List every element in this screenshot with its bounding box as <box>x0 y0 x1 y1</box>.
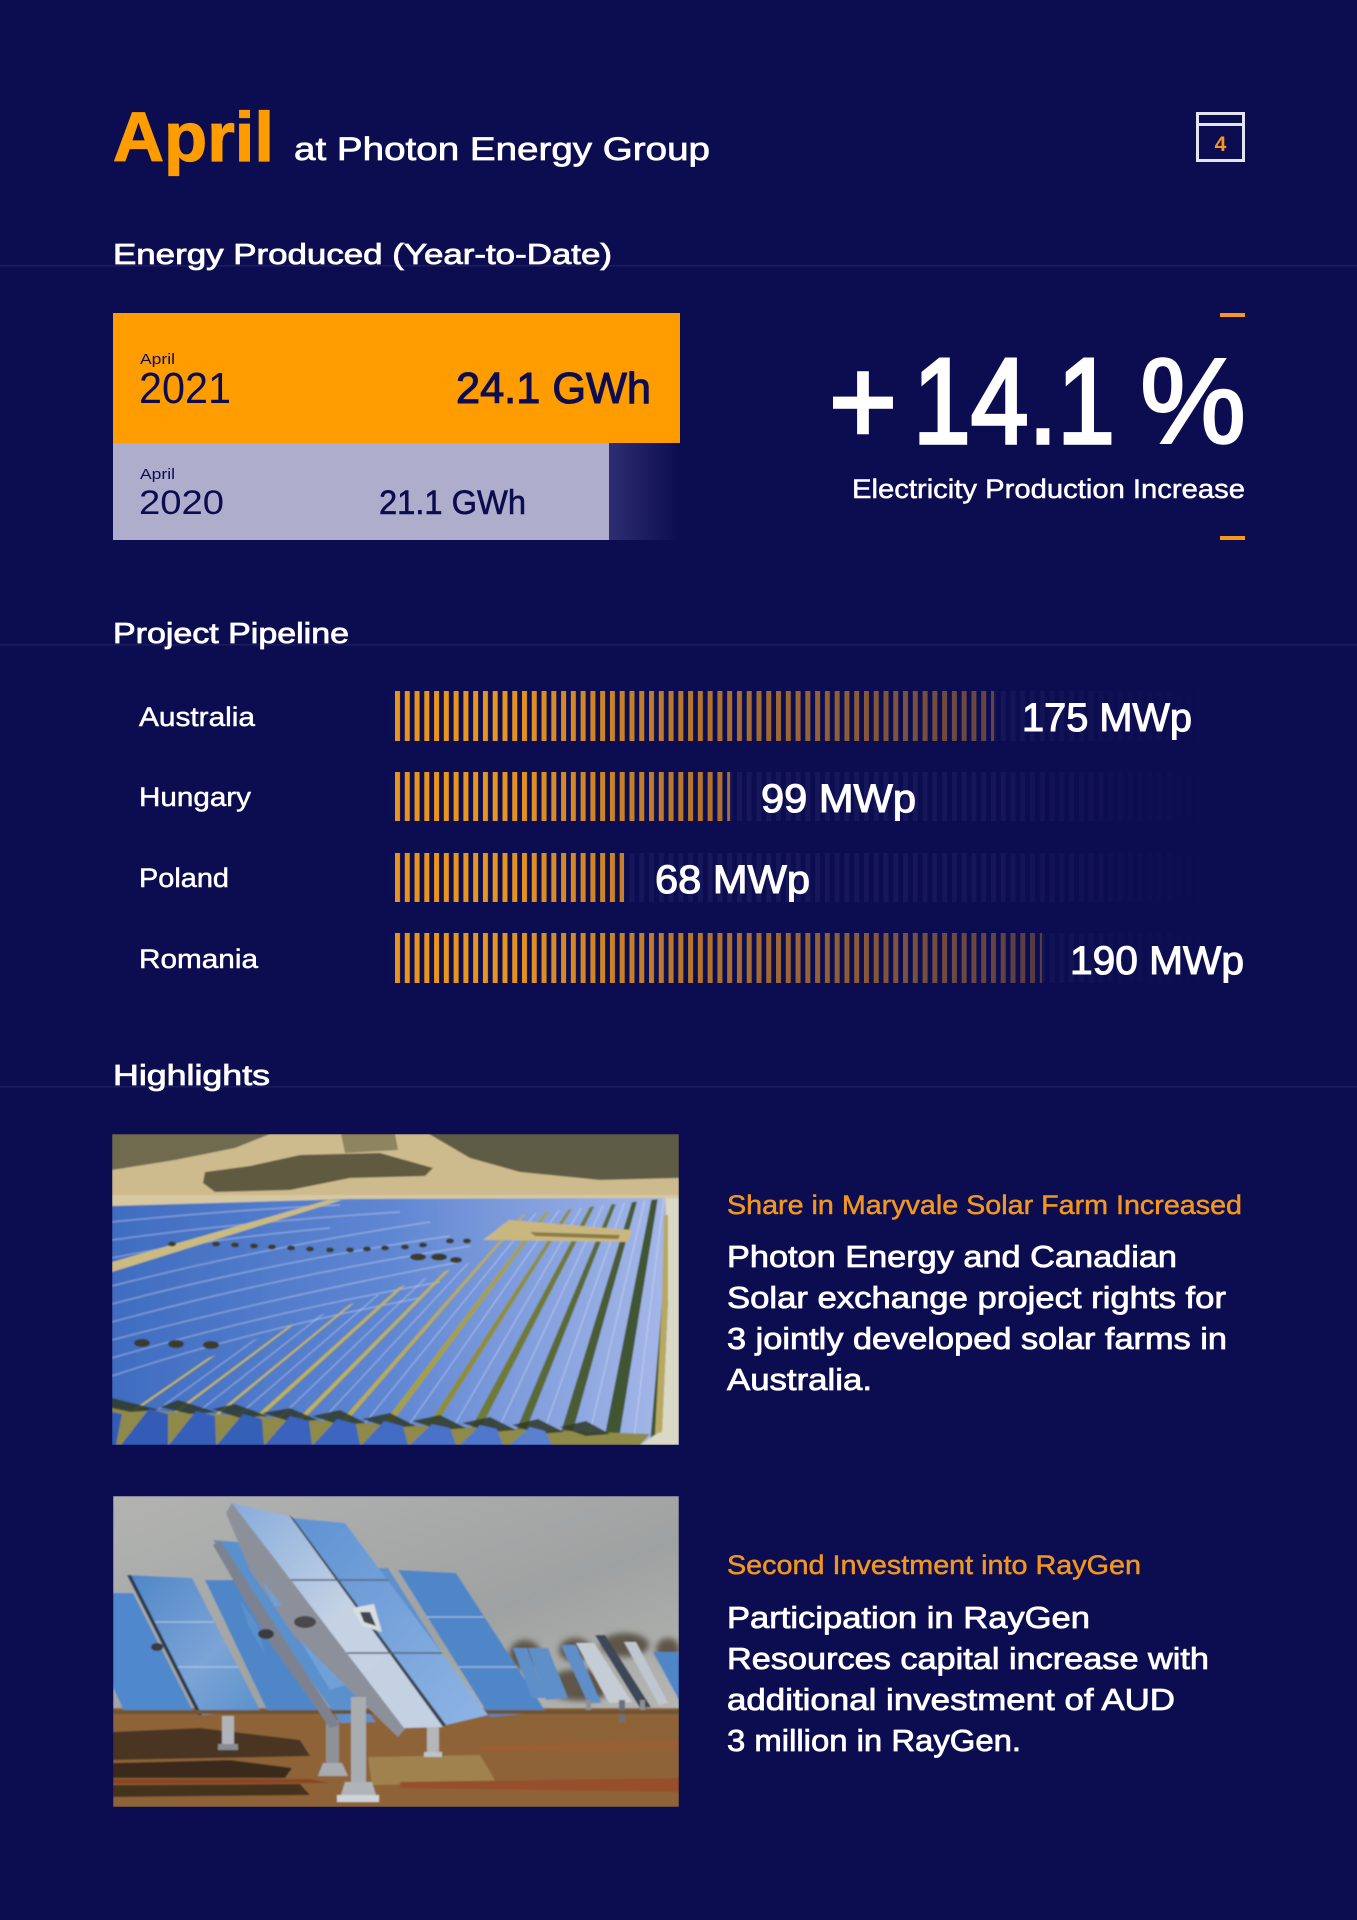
title: April <box>113 98 274 176</box>
text block: Maryvale highlight: Australia. <box>727 1362 872 1397</box>
text block: Maryvale highlight: Photon Energy and Canadian <box>727 1239 1177 1274</box>
text block: Maryvale highlight <box>727 1190 1242 1397</box>
text block: RayGen highlight <box>727 1550 1209 1758</box>
icon: calendar <box>1197 114 1244 160</box>
heading: highlights: Highlights <box>113 1060 270 1092</box>
chart: project pipeline bars <box>139 691 1250 983</box>
callout: production increase <box>829 313 1246 540</box>
title <box>113 98 710 176</box>
panel: energy comparison bars <box>113 313 680 540</box>
row: Hungary: 99 MWp <box>761 777 916 821</box>
callout: production increase: + <box>829 333 897 469</box>
text block: Maryvale highlight: Share in Maryvale Solar Farm Increased <box>727 1190 1242 1220</box>
row: Australia: 175 MWp <box>1022 696 1192 740</box>
row: Hungary: Hungary <box>139 782 252 812</box>
row: Poland: Poland <box>139 863 229 893</box>
row: Romania: Romania <box>139 944 259 974</box>
row: Australia <box>139 691 1250 741</box>
text block: RayGen highlight: 3 million in RayGen. <box>727 1723 1021 1758</box>
row: Poland <box>141 853 1006 902</box>
heading: energy produced: Energy Produced (Year-to-Date) <box>113 239 612 271</box>
text block: Maryvale highlight: 3 jointly developed solar farms in <box>727 1321 1227 1356</box>
row: Australia: Australia <box>139 702 256 732</box>
row: Romania: 190 MWp <box>1070 939 1244 983</box>
bar: April 2021: 24.1 GWh <box>456 364 651 413</box>
text block: RayGen highlight: additional investment of AUD <box>727 1682 1175 1717</box>
photo: RayGen solar mirrors <box>113 1496 680 1807</box>
heading: project pipeline: Project Pipeline <box>113 618 349 650</box>
bar: April 2020: 2020 <box>139 484 224 522</box>
callout: production increase: % <box>1140 333 1246 469</box>
bar: April 2021: April <box>140 351 175 368</box>
bar: April 2020 <box>113 443 680 540</box>
icon: calendar: 4 <box>1215 133 1227 156</box>
text block: RayGen highlight: Resources capital increase with <box>727 1641 1209 1676</box>
row: Poland: 68 MWp <box>655 858 810 902</box>
row: Romania <box>139 933 1250 983</box>
title: at Photon Energy Group <box>294 131 710 167</box>
photo: Maryvale solar farm <box>112 1134 679 1445</box>
text block: Maryvale highlight: Solar exchange project rights for <box>727 1280 1226 1315</box>
bar: April 2021: 2021 <box>139 364 231 413</box>
text block: RayGen highlight: Participation in RayGen <box>727 1600 1090 1635</box>
callout: production increase: 14.1 <box>913 333 1115 469</box>
text block: RayGen highlight: Second Investment into RayGen <box>727 1550 1141 1580</box>
bar: April 2020: 21.1 GWh <box>379 484 526 522</box>
bar: April 2020: April <box>140 466 175 483</box>
callout: production increase: Electricity Production Increase <box>852 474 1245 504</box>
row: Hungary <box>141 772 1006 821</box>
bar: April 2021 <box>113 313 680 443</box>
